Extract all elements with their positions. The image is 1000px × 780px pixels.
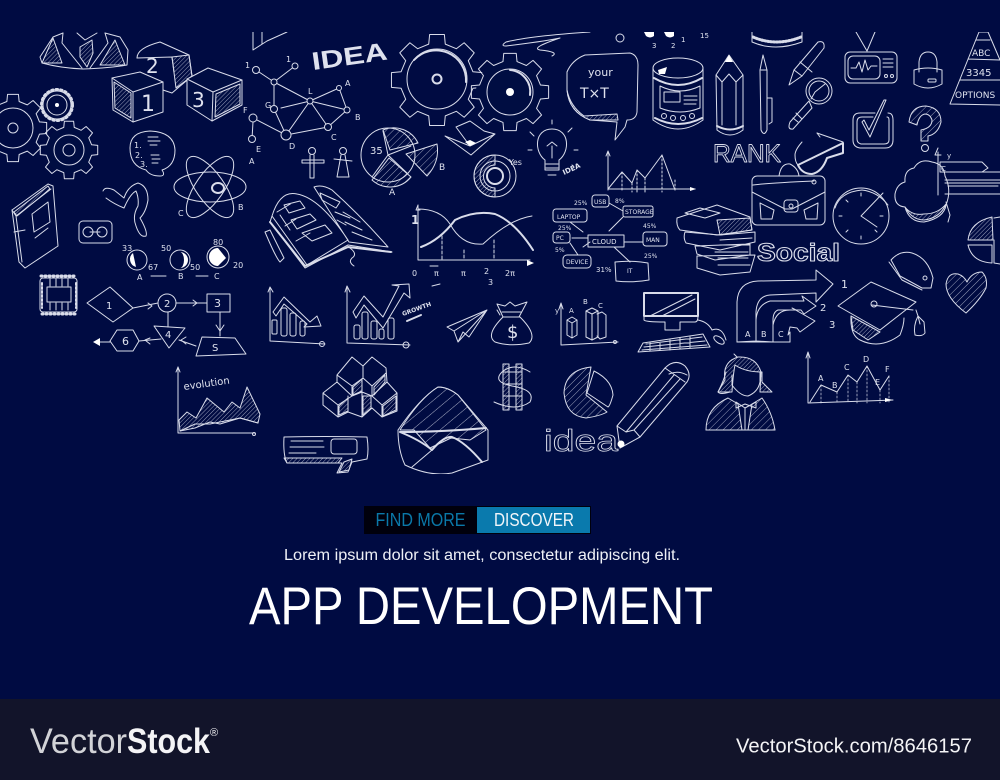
icon: mind map cloud diagram: CLOUD	[592, 238, 617, 246]
chart: peaks line chart	[606, 151, 696, 192]
icon: percentage pies: C	[214, 272, 220, 281]
icon: mind map cloud diagram: 31%	[596, 266, 612, 274]
icon: pie chart with wedge	[564, 367, 613, 418]
chart: sine curves: 1	[411, 213, 419, 227]
icon: mind map cloud diagram: DEVICE	[566, 259, 588, 266]
icon: pencil writing idea	[617, 362, 689, 448]
icon: dollar sign	[494, 364, 531, 410]
icon: envelope	[398, 387, 488, 474]
chart: sine curves: π	[461, 269, 466, 278]
chart: sine curves: π	[434, 269, 439, 278]
icon: cube 1	[112, 72, 163, 122]
icon: speech bubble list	[130, 131, 175, 176]
heading: RANK lettering: RANK	[713, 140, 781, 168]
icon: mind map cloud diagram	[553, 195, 667, 282]
icon: speech bubble list: 3.	[140, 160, 148, 169]
chart: evolution area chart: evolution	[183, 376, 230, 393]
button group	[364, 506, 591, 534]
chart: 3D bars: B	[583, 298, 588, 306]
icon: open book	[265, 186, 392, 268]
button: find more	[364, 506, 591, 534]
chart: flow diagram: 3	[214, 297, 221, 310]
footer bar	[0, 699, 1000, 780]
icon: mind map cloud diagram: 25%	[644, 253, 658, 260]
icon: signposts: C	[941, 165, 946, 173]
icon: network graph	[243, 55, 360, 166]
icon: network graph: G	[265, 101, 271, 110]
icon: cube 1: 1	[141, 92, 155, 117]
chart: 3D bars: C	[598, 302, 603, 310]
icon: top numbered dots: 15	[700, 32, 709, 40]
icon: middle gear	[40, 121, 98, 179]
icon: network graph: D	[289, 142, 295, 151]
icon: curved arrows: B	[761, 330, 766, 339]
icon: signposts: y	[947, 152, 951, 160]
icon: left gear	[0, 94, 47, 162]
chart: flow diagram: 1	[106, 301, 112, 312]
icon: money bag	[491, 302, 532, 345]
heading: idea lettering: idea	[544, 423, 619, 458]
icon: open box	[445, 121, 495, 155]
icon: percentage pies: B	[178, 272, 184, 281]
icon: large gear	[391, 34, 483, 126]
icon: top numbered dots: 2	[671, 42, 675, 50]
icon: magnifier	[789, 78, 832, 129]
chart: sine curves: 3	[488, 278, 493, 287]
chart: sine curves: 2π	[505, 269, 515, 278]
icon: computer mouse	[889, 252, 933, 290]
button: discover: DISCOVER	[494, 510, 574, 530]
icon: percentage pies: 50	[161, 244, 171, 253]
chart: A-F line chart: C	[844, 363, 850, 372]
icon: ribbon fragment	[253, 32, 287, 50]
icon: second gear	[471, 53, 549, 131]
icon: mind map cloud diagram: IT	[627, 268, 633, 275]
icon: atom	[174, 149, 246, 225]
icon: mind map cloud diagram: 25%	[558, 225, 572, 232]
icon: mind map cloud diagram: USB	[594, 199, 606, 206]
icon: spiral disc	[474, 155, 522, 197]
icon: heart	[946, 272, 986, 313]
footer image id: VectorStock.com/8646157	[736, 736, 972, 758]
icon: percentage pies: 20	[233, 261, 243, 270]
icon: network graph: E	[256, 145, 261, 154]
icon: stack of books	[677, 205, 755, 275]
icon: network graph: L	[308, 87, 313, 96]
chart: A-F line chart: B	[832, 381, 838, 390]
icon: cube 3	[187, 68, 242, 121]
doodle field	[0, 32, 1000, 474]
chart: falling bars	[268, 287, 325, 346]
chart: rising bars	[345, 284, 432, 348]
chart: evolution area chart	[176, 367, 260, 436]
icon: percentage pies: 50	[190, 263, 200, 272]
icon: pie chart with slice: A	[389, 188, 396, 198]
icon: graduation cap	[838, 282, 925, 344]
icon: microchip	[40, 276, 77, 314]
icon: speech bubble your text: T×T	[579, 86, 609, 102]
chart: flow diagram	[87, 287, 246, 356]
icon: speech bubble list: 2.	[135, 151, 143, 160]
heading: IDEA hand lettering: IDEA	[310, 38, 389, 76]
icon: network graph: F	[243, 106, 248, 115]
icon: mind map cloud diagram: 25%	[574, 200, 588, 207]
icon: mind map cloud diagram: 8%	[615, 198, 625, 205]
icon: mind map cloud diagram: MAN	[646, 237, 660, 244]
icon: curved arrows	[737, 270, 848, 342]
icon: percentage pies: 67	[148, 263, 158, 272]
icon: network graph: A	[345, 79, 351, 88]
title: APP DEVELOPMENT	[249, 577, 713, 636]
icon: cube 2	[137, 42, 192, 93]
icon: question squiggle	[103, 183, 148, 236]
icon: top numbered dots: 1	[681, 36, 685, 44]
icon: light bulb: IDEA	[561, 161, 582, 177]
icon: book	[12, 184, 58, 268]
icon: mind map cloud diagram: LAPTOP	[557, 214, 581, 221]
icon: question mark	[909, 106, 941, 152]
icon: pie chart with slice: 35	[370, 146, 383, 157]
icon: network graph: 1	[245, 61, 250, 70]
icon: suit	[40, 33, 128, 69]
icon: big pencil	[716, 55, 743, 135]
button: discover	[477, 507, 590, 533]
icon: speech bubble list: 1.	[134, 141, 142, 150]
chart: 3D bars	[555, 298, 618, 345]
chart: A-F line chart: E	[875, 378, 880, 387]
icon: network graph: B	[355, 113, 360, 122]
icon: glasses	[795, 133, 843, 174]
icon: paint can	[653, 58, 703, 129]
footer logo: ®	[210, 727, 218, 739]
icon: network graph: A	[249, 157, 255, 166]
chart: 3D bars: y	[555, 307, 559, 315]
icon: pie chart right	[968, 217, 1000, 264]
icon: pie chart with slice	[361, 128, 445, 198]
icon: padlock	[914, 52, 942, 88]
icon: small serrated gear	[42, 90, 72, 120]
icon: stick figures	[302, 148, 352, 178]
chart: flow diagram: 6	[122, 335, 129, 348]
icon: curved arrows: A	[745, 330, 751, 339]
icon: coin stack	[752, 32, 802, 47]
chart: A-F line chart	[806, 352, 893, 403]
icon: atom: B	[238, 203, 244, 212]
icon: spiral disc: Yes	[508, 158, 522, 167]
icon: check box	[853, 100, 893, 148]
icon: curved arrows: 2	[820, 303, 826, 314]
heading: Social lettering: Social	[757, 239, 840, 267]
chart: A-F line chart: A	[818, 374, 824, 383]
icon: cloud	[895, 161, 950, 222]
icon: pie chart with slice: B	[439, 163, 445, 173]
icon: curved arrows: C	[778, 330, 784, 339]
footer logo: VectorStock	[30, 722, 222, 761]
icon: cube 2: 2	[146, 54, 159, 78]
icon: clock	[833, 188, 889, 244]
icon: options pyramid: OPTIONS	[955, 91, 995, 101]
icon: GO tag	[79, 221, 112, 243]
icon: top numbered dots: 3	[652, 42, 656, 50]
icon: light bulb	[528, 120, 582, 177]
icon: signposts	[935, 148, 1000, 195]
chart: rising bars: GROWTH	[401, 301, 432, 318]
chart: flow diagram: S	[212, 343, 218, 354]
icon: paper plane	[447, 310, 487, 342]
icon: money bag: $	[507, 322, 518, 343]
icon: percentage pies	[122, 238, 243, 282]
icon: cube 3: 3	[192, 88, 205, 112]
icon: atom: C	[178, 209, 184, 218]
icon: options pyramid: 3345	[966, 68, 991, 79]
icon: comment bar	[284, 436, 368, 473]
chart: flow diagram: 2	[164, 299, 170, 310]
icon: top numbered dots	[616, 32, 709, 50]
icon: mind map cloud diagram: STORAGE	[625, 209, 654, 216]
icon: curved arrows: 1	[841, 278, 848, 291]
icon: speech bubble your text: your	[588, 66, 613, 79]
chart: flow diagram: 4	[165, 330, 171, 341]
icon: thin pen	[760, 55, 772, 134]
icon: percentage pies: 33	[122, 244, 132, 253]
chart: sine curves: 2	[484, 267, 489, 276]
icon: percentage pies: 80	[213, 238, 223, 247]
icon: speech bubble your text	[567, 53, 638, 140]
icon: mind map cloud diagram: PC	[556, 235, 564, 242]
icon: television	[845, 32, 897, 83]
icon: mind map cloud diagram: 5%	[555, 247, 565, 254]
icon: network graph: C	[331, 133, 337, 142]
icon: isometric cubes	[323, 357, 397, 417]
icon: desktop computer	[638, 293, 726, 352]
icon: mind map cloud diagram: 45%	[643, 223, 657, 230]
chart: A-F line chart: D	[863, 355, 869, 364]
icon: percentage pies: A	[137, 273, 143, 282]
button: find more: FIND MORE	[376, 510, 466, 530]
icon: briefcase	[752, 164, 825, 225]
icon: network graph: 1	[286, 55, 291, 64]
chart: A-F line chart: F	[885, 365, 890, 374]
icon: top squiggle	[503, 32, 590, 56]
chart: sine curves	[411, 205, 534, 287]
icon: options pyramid	[950, 32, 1000, 105]
icon: curved arrows: 3	[829, 320, 835, 331]
subtitle: Lorem ipsum dolor sit amet, consectetur adipiscing elit.	[284, 547, 680, 564]
icon: options pyramid: ABC	[972, 49, 990, 59]
chart: 3D bars: A	[569, 307, 574, 315]
icon: woman portrait	[706, 354, 775, 430]
chart: sine curves: 0	[412, 269, 417, 278]
icon: marker	[789, 42, 824, 85]
